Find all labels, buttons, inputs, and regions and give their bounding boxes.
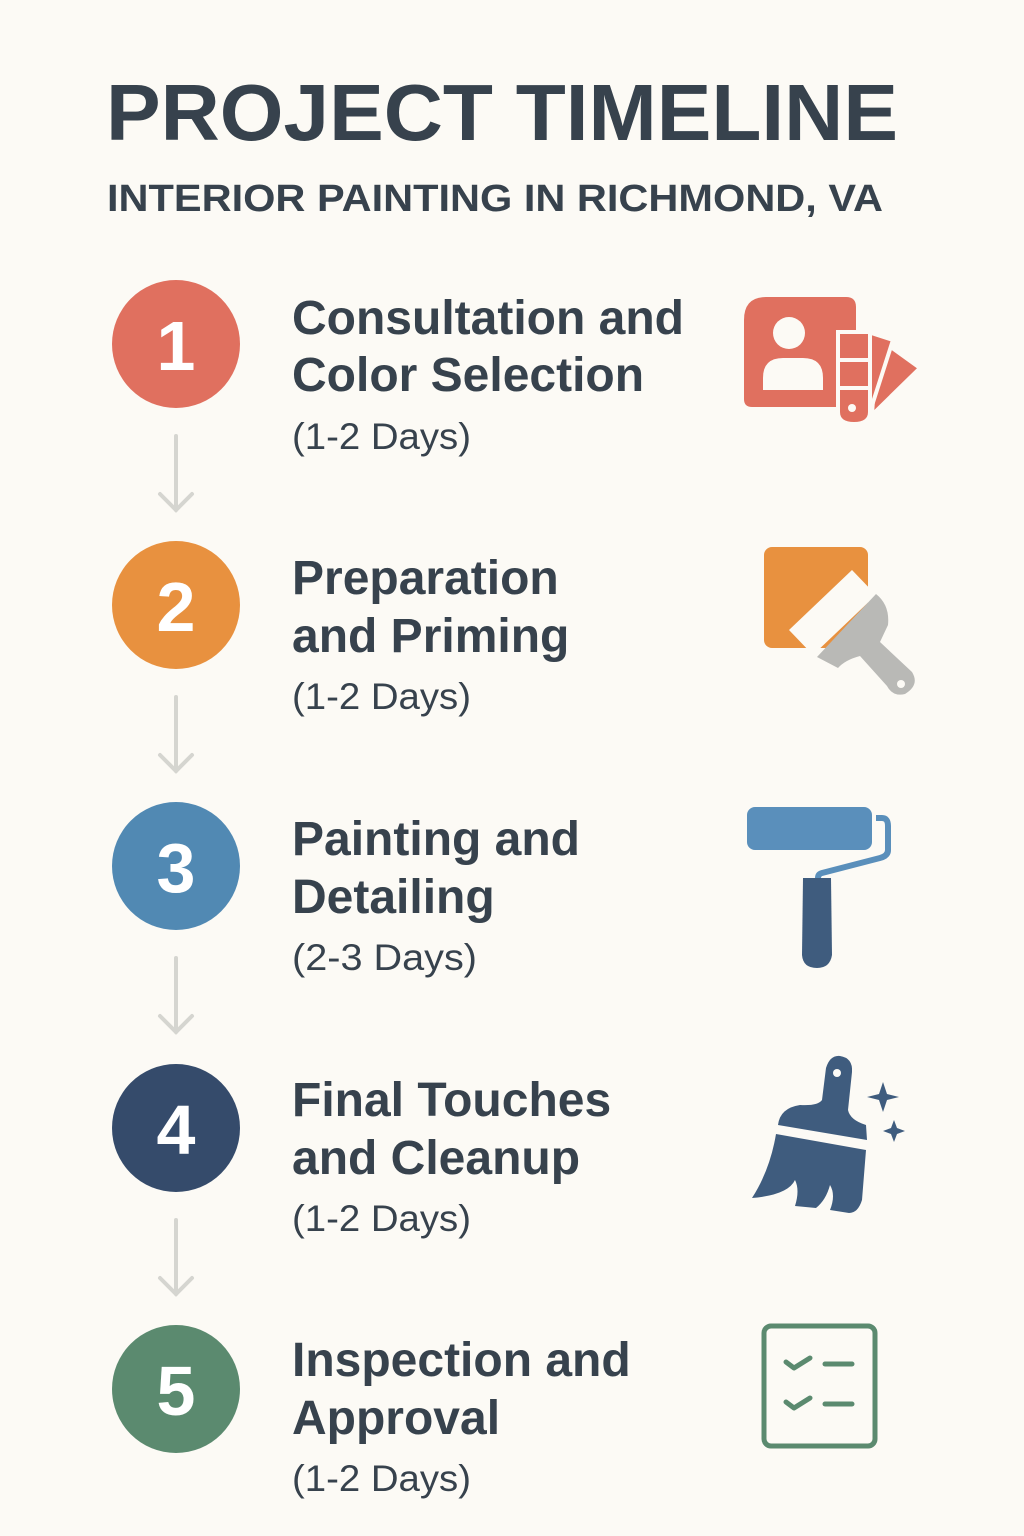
arrow 1: [160, 436, 192, 510]
step 3: Painting and: [292, 813, 580, 866]
step 5: (1-2 Days): [292, 1458, 471, 1499]
step 1: 1: [157, 307, 195, 385]
step 5: Approval: [292, 1392, 500, 1445]
step 4: (1-2 Days): [292, 1198, 471, 1239]
icon: paint roller: [747, 807, 888, 968]
icon: brush with sparkles: [752, 1056, 905, 1213]
step 2: 2: [157, 568, 195, 646]
arrow 4: [160, 1220, 192, 1294]
step 5: 5: [157, 1352, 195, 1430]
step 5: [112, 1325, 631, 1499]
step 3: (2-3 Days): [292, 937, 477, 978]
step 4: and Cleanup: [292, 1132, 580, 1185]
step 4: 4: [157, 1091, 196, 1169]
step 2: (1-2 Days): [292, 676, 471, 717]
step 1: [112, 280, 684, 457]
icon: checklist: [764, 1326, 875, 1446]
step 2: Preparation: [292, 552, 559, 605]
step 3: 3: [157, 829, 195, 907]
subtitle: INTERIOR PAINTING IN RICHMOND, VA: [107, 178, 883, 220]
step 2: [112, 541, 569, 717]
step 3: [112, 802, 580, 978]
icon: scraper and primer: [764, 547, 915, 695]
step 5: Inspection and: [292, 1334, 631, 1387]
step 1: Consultation and: [292, 292, 684, 345]
step 2: and Priming: [292, 610, 569, 663]
step 1: (1-2 Days): [292, 416, 471, 457]
title: PROJECT TIMELINE: [106, 68, 898, 157]
arrow 2: [160, 697, 192, 771]
step 1: Color Selection: [292, 349, 644, 402]
step 4: [112, 1064, 611, 1239]
step 4: Final Touches: [292, 1074, 611, 1127]
arrow 3: [160, 958, 192, 1032]
step 3: Detailing: [292, 871, 495, 924]
icon: consultation card and swatches: [744, 297, 920, 424]
